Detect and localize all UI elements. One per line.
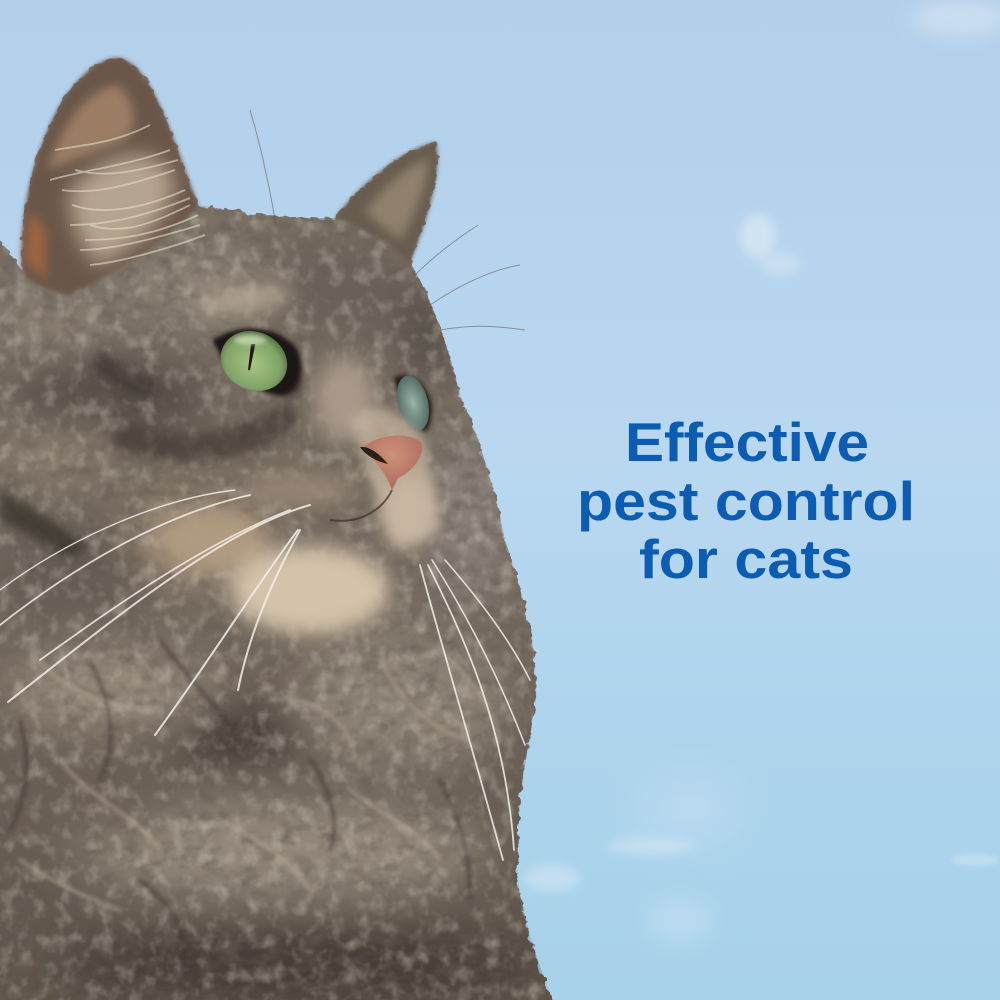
headline line 2: pest control xyxy=(577,470,915,532)
whiskers xyxy=(0,490,530,860)
left ear xyxy=(22,58,205,295)
headline: Effective pest control for cats xyxy=(577,411,915,590)
fur texture xyxy=(0,50,570,1000)
headline line 1: Effective xyxy=(625,411,869,473)
cat silhouette xyxy=(0,58,552,1000)
fur tonal patches xyxy=(0,245,540,1000)
ruff fur strokes xyxy=(10,640,500,980)
left eye xyxy=(211,320,301,402)
cat photo illustration xyxy=(0,50,570,1000)
face light areas xyxy=(155,282,434,634)
headline line 3: for cats xyxy=(639,528,853,590)
brow whiskers xyxy=(250,110,525,330)
right eye xyxy=(392,372,434,434)
right ear xyxy=(335,142,437,262)
clouds xyxy=(524,0,1000,942)
nose xyxy=(330,408,440,545)
dark facial markings xyxy=(0,350,302,560)
